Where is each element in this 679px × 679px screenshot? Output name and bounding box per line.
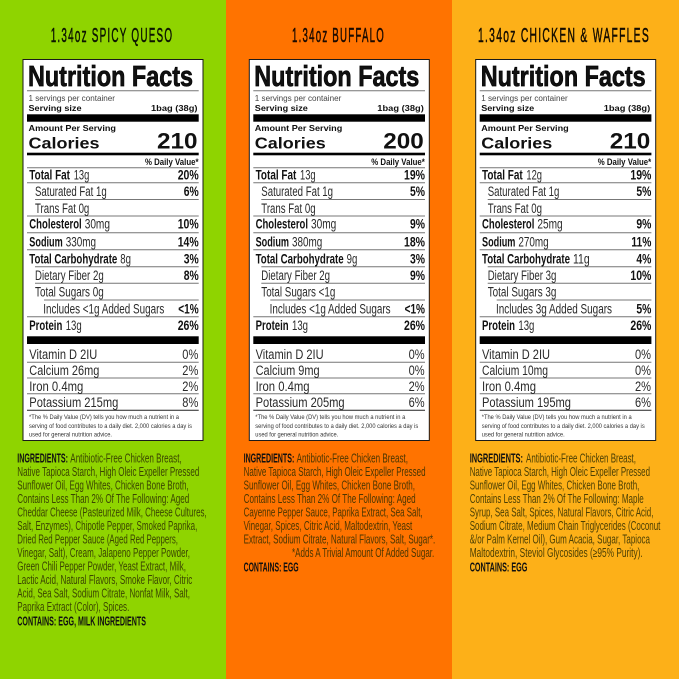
- panel: buffalo: [226, 0, 452, 679]
- nutrition label: buffalo: % Daily Value*: [371, 157, 425, 168]
- nutrition label: buffalo: Calcium 9mg: [256, 363, 320, 378]
- nutrition label: buffalo: Dietary Fiber 2g: [261, 268, 330, 283]
- nutrition label: buffalo: 13g: [300, 167, 316, 182]
- nutrition label: chicken and waffles: 270mg: [518, 235, 549, 250]
- ingredients: spicy queso: Cheddar Cheese (Pasteurized Milk, Cheese Cultures,: [17, 505, 207, 519]
- nutrition label: buffalo: 0%: [409, 347, 425, 362]
- ingredients: spicy queso: Paprika Extract (Color), Spices.: [17, 600, 129, 614]
- ingredients: spicy queso: Acid, Sea Salt, Sodium Citrate, Nonfat Milk, Salt,: [17, 587, 190, 601]
- nutrition label: spicy queso: Saturated Fat 1g: [35, 184, 107, 199]
- nutrition label: buffalo: 19%: [404, 167, 425, 182]
- nutrition label: buffalo: 200: [383, 128, 424, 153]
- nutrition label: chicken and waffles: 10%: [630, 268, 651, 283]
- nutrition label: chicken and waffles: 2%: [635, 379, 651, 394]
- ingredients: buffalo: Sunflower Oil, Egg Whites, Chicken Bone Broth,: [244, 478, 415, 492]
- nutrition label: spicy queso: Total Fat: [29, 167, 70, 182]
- ingredients: spicy queso: Green Chili Pepper Powder, Yeast Extract, Milk,: [17, 560, 186, 574]
- panel: buffalo: 1.34oz BUFFALO: [292, 25, 385, 47]
- nutrition label: spicy queso: Nutrition Facts: [28, 61, 193, 93]
- nutrition label: spicy queso: Potassium 215mg: [29, 395, 118, 410]
- nutrition label: spicy queso: Total Sugars 0g: [35, 285, 104, 300]
- ingredients: spicy queso: Contains Less Than 2% Of The Following: Aged: [17, 492, 189, 506]
- nutrition label: buffalo: 30mg: [311, 217, 336, 232]
- nutrition label: chicken and waffles: Serving size: [481, 104, 535, 113]
- nutrition label: buffalo: Potassium 205mg: [256, 395, 345, 410]
- nutrition label: buffalo: 3%: [410, 251, 425, 266]
- nutrition label: buffalo: 13g: [292, 318, 308, 333]
- panel: chicken and waffles: [452, 0, 679, 679]
- ingredients: spicy queso: Lactic Acid, Natural Flavors, Smoke Flavor, Citric: [17, 573, 192, 587]
- nutrition label: chicken and waffles: 1 servings per container: [481, 94, 568, 103]
- nutrition label: buffalo: Total Carbohydrate: [256, 251, 344, 266]
- nutrition label: chicken and waffles: [476, 60, 656, 440]
- nutrition label: spicy queso: 330mg: [66, 235, 96, 250]
- nutrition label: buffalo: Total Sugars <1g: [261, 285, 335, 300]
- nutrition label: chicken and waffles: Calcium 10mg: [482, 363, 548, 378]
- nutrition label: spicy queso: 1bag (38g): [151, 104, 198, 113]
- nutrition label: buffalo: Includes <1g Added Sugars: [270, 301, 391, 316]
- nutrition label: spicy queso: 8g: [120, 251, 131, 266]
- nutrition label: chicken and waffles: Dietary Fiber 3g: [488, 268, 556, 283]
- nutrition label: spicy queso: 6%: [184, 184, 199, 199]
- nutrition label: spicy queso: <1%: [178, 301, 199, 316]
- nutrition label: chicken and waffles: 25mg: [537, 217, 563, 232]
- nutrition label: chicken and waffles: Total Sugars 3g: [488, 285, 556, 300]
- nutrition label: buffalo: 26%: [404, 318, 425, 333]
- nutrition label: buffalo: Saturated Fat 1g: [261, 184, 333, 199]
- ingredients: spicy queso: Antibiotic-Free Chicken Breast,: [70, 451, 182, 465]
- ingredients: chicken and waffles: [470, 451, 661, 575]
- nutrition label: chicken and waffles: 12g: [526, 167, 542, 182]
- nutrition label: chicken and waffles: % Daily Value*: [598, 157, 651, 168]
- ingredients: spicy queso: Sunflower Oil, Egg Whites, Chicken Bone Broth,: [17, 478, 189, 492]
- nutrition label: buffalo: 9g: [347, 251, 357, 266]
- nutrition label: chicken and waffles: 5%: [636, 301, 651, 316]
- nutrition label: spicy queso: 2%: [182, 379, 198, 394]
- nutrition label: chicken and waffles: 0%: [635, 347, 651, 362]
- nutrition label: spicy queso: 13g: [74, 167, 89, 182]
- nutrition label: spicy queso: Dietary Fiber 2g: [35, 268, 104, 283]
- nutrition label: chicken and waffles: 210: [610, 128, 650, 153]
- nutrition label: spicy queso: Calcium 26mg: [29, 363, 99, 378]
- nutrition label: chicken and waffles: 9%: [636, 217, 651, 232]
- ingredients: chicken and waffles: INGREDIENTS:: [470, 451, 523, 465]
- nutrition label: chicken and waffles: 0%: [635, 363, 651, 378]
- nutrition label: buffalo: 5%: [410, 184, 425, 199]
- nutrition label: spicy queso: Includes <1g Added Sugars: [43, 301, 164, 316]
- nutrition label: spicy queso: [23, 60, 203, 440]
- nutrition label: buffalo: [249, 60, 429, 440]
- ingredients: spicy queso: Dried Red Pepper Sauce (Aged Red Peppers,: [17, 533, 178, 547]
- nutrition label: spicy queso: 26%: [178, 318, 199, 333]
- nutrition label: buffalo: Calories: [255, 135, 326, 152]
- ingredients: buffalo: INGREDIENTS:: [244, 451, 294, 465]
- panel: spicy queso: [0, 0, 226, 679]
- nutrition label: buffalo: used for general nutrition advice.: [255, 432, 338, 439]
- nutrition label: chicken and waffles: serving of food contributes to a daily diet. 2,000 calories a day is: [482, 423, 645, 430]
- ingredients: buffalo: Cayenne Pepper Sauce, Paprika Extract, Sea Salt,: [244, 505, 423, 519]
- nutrition label: chicken and waffles: 4%: [636, 251, 651, 266]
- nutrition label: buffalo: Nutrition Facts: [254, 61, 419, 93]
- nutrition label: spicy queso: Serving size: [28, 104, 82, 113]
- nutrition label: buffalo: 18%: [404, 235, 425, 250]
- nutrition label: chicken and waffles: 1bag (38g): [604, 104, 651, 113]
- nutrition label: spicy queso: % Daily Value*: [145, 157, 199, 168]
- nutrition label: chicken and waffles: Iron 0.4mg: [482, 379, 536, 394]
- nutrition label: buffalo: Trans Fat 0g: [261, 201, 316, 216]
- ingredients: buffalo: Contains Less Than 2% Of The Following: Aged: [244, 492, 416, 506]
- ingredients: buffalo: [244, 451, 435, 575]
- nutrition label: spicy queso: Total Carbohydrate: [29, 251, 118, 266]
- nutrition label: buffalo: 1 servings per container: [255, 94, 342, 103]
- nutrition label: chicken and waffles: Total Fat: [482, 167, 523, 182]
- ingredients: buffalo: Antibiotic-Free Chicken Breast,: [297, 451, 408, 465]
- nutrition label: spicy queso: used for general nutrition advice.: [29, 432, 112, 439]
- nutrition label: buffalo: Protein: [256, 318, 289, 333]
- nutrition label: chicken and waffles: Vitamin D 2IU: [482, 347, 550, 362]
- nutrition label: spicy queso: 2%: [182, 363, 198, 378]
- nutrition label: buffalo: 380mg: [292, 235, 322, 250]
- nutrition label: chicken and waffles: Total Carbohydrate: [482, 251, 570, 266]
- nutrition label: spicy queso: 8%: [184, 268, 199, 283]
- nutrition label: spicy queso: *The % Daily Value (DV) tells you how much a nutrient in a: [29, 414, 179, 421]
- nutrition label: buffalo: Total Fat: [256, 167, 297, 182]
- nutrition label: buffalo: 6%: [409, 395, 425, 410]
- nutrition label: chicken and waffles: Saturated Fat 1g: [488, 184, 559, 199]
- nutrition label: spicy queso: serving of food contributes to a daily diet. 2,000 calories a day is: [29, 423, 193, 430]
- nutrition label: spicy queso: 14%: [178, 235, 199, 250]
- ingredients: spicy queso: INGREDIENTS:: [17, 451, 68, 465]
- nutrition label: chicken and waffles: 19%: [630, 167, 651, 182]
- nutrition label: buffalo: *The % Daily Value (DV) tells you how much a nutrient in a: [255, 414, 406, 421]
- nutrition label: spicy queso: Calories: [28, 135, 100, 152]
- nutrition label: spicy queso: 1 servings per container: [28, 94, 115, 103]
- nutrition label: buffalo: Amount Per Serving: [255, 123, 342, 133]
- ingredients: buffalo: CONTAINS: EGG: [244, 561, 299, 575]
- nutrition label: buffalo: <1%: [405, 301, 425, 316]
- ingredients: buffalo: Vinegar, Spices, Citric Acid, Maltodextrin, Yeast: [244, 519, 413, 533]
- nutrition label: buffalo: 9%: [410, 268, 425, 283]
- nutrition label: buffalo: Vitamin D 2IU: [256, 347, 324, 362]
- nutrition label: chicken and waffles: used for general nutrition advice.: [482, 432, 565, 439]
- nutrition label: buffalo: Serving size: [255, 104, 308, 113]
- nutrition label: buffalo: 9%: [410, 217, 425, 232]
- nutrition label: buffalo: serving of food contributes to a daily diet. 2,000 calories a day is: [255, 423, 419, 430]
- nutrition label: buffalo: Cholesterol: [256, 217, 308, 232]
- ingredients: spicy queso: [17, 451, 207, 629]
- nutrition label: spicy queso: 13g: [66, 318, 82, 333]
- nutrition label: spicy queso: 3%: [184, 251, 199, 266]
- nutrition label: chicken and waffles: 26%: [630, 318, 651, 333]
- ingredients: buffalo: Extract, Sodium Citrate, Natural Flavors, Salt, Sugar*.: [244, 533, 435, 547]
- nutrition label: chicken and waffles: Trans Fat 0g: [488, 201, 542, 216]
- ingredients: buffalo: *Adds A Trivial Amount Of Added Sugar.: [292, 546, 434, 560]
- nutrition label: chicken and waffles: Potassium 195mg: [482, 395, 571, 410]
- nutrition label: chicken and waffles: Includes 3g Added Sugars: [496, 301, 612, 316]
- nutrition label: buffalo: 0%: [409, 363, 425, 378]
- nutrition label: spicy queso: 20%: [178, 167, 199, 182]
- nutrition label: spicy queso: Vitamin D 2IU: [29, 347, 97, 362]
- nutrition label: buffalo: Sodium: [256, 235, 289, 250]
- nutrition label: spicy queso: Amount Per Serving: [28, 123, 116, 133]
- nutrition label: spicy queso: Iron 0.4mg: [29, 379, 83, 394]
- nutrition label: spicy queso: 210: [157, 128, 198, 153]
- ingredients: chicken and waffles: CONTAINS: EGG: [470, 561, 527, 575]
- nutrition label: chicken and waffles: Cholesterol: [482, 217, 534, 232]
- nutrition label: spicy queso: 10%: [178, 217, 199, 232]
- ingredients: spicy queso: Salt, Enzymes), Chipotle Pepper, Smoked Paprika,: [17, 519, 197, 533]
- nutrition label: spicy queso: Sodium: [29, 235, 63, 250]
- nutrition label: chicken and waffles: 6%: [635, 395, 651, 410]
- nutrition label: chicken and waffles: Calories: [481, 135, 552, 152]
- nutrition label: spicy queso: Cholesterol: [29, 217, 82, 232]
- nutrition label: spicy queso: 8%: [182, 395, 198, 410]
- nutrition label: chicken and waffles: *The % Daily Value (DV) tells you how much a nutrient in a: [482, 414, 632, 421]
- nutrition label: spicy queso: Protein: [29, 318, 62, 333]
- nutrition label: chicken and waffles: 11%: [631, 235, 651, 250]
- nutrition label: chicken and waffles: 11g: [573, 251, 590, 266]
- nutrition label: spicy queso: Trans Fat 0g: [35, 201, 89, 216]
- nutrition label: chicken and waffles: Amount Per Serving: [481, 123, 569, 133]
- nutrition label: buffalo: Iron 0.4mg: [256, 379, 310, 394]
- nutrition label: spicy queso: 0%: [182, 347, 198, 362]
- ingredients: spicy queso: CONTAINS: EGG, MILK INGREDIENTS: [17, 615, 146, 629]
- nutrition label: chicken and waffles: 13g: [518, 318, 534, 333]
- ingredients: buffalo: Native Tapioca Starch, High Oleic Expeller Pressed: [244, 465, 426, 479]
- nutrition label: spicy queso: 30mg: [85, 217, 110, 232]
- nutrition label: buffalo: 2%: [409, 379, 425, 394]
- nutrition label: chicken and waffles: Protein: [482, 318, 515, 333]
- nutrition label: chicken and waffles: 5%: [636, 184, 651, 199]
- ingredients: spicy queso: Vinegar, Salt), Cream, Jalapeno Pepper Powder,: [17, 546, 190, 560]
- panel: spicy queso: 1.34oz SPICY QUESO: [51, 25, 173, 47]
- nutrition label: chicken and waffles: Sodium: [482, 235, 515, 250]
- ingredients: spicy queso: Native Tapioca Starch, High Oleic Expeller Pressed: [17, 465, 199, 479]
- nutrition label: buffalo: 1bag (38g): [377, 104, 424, 113]
